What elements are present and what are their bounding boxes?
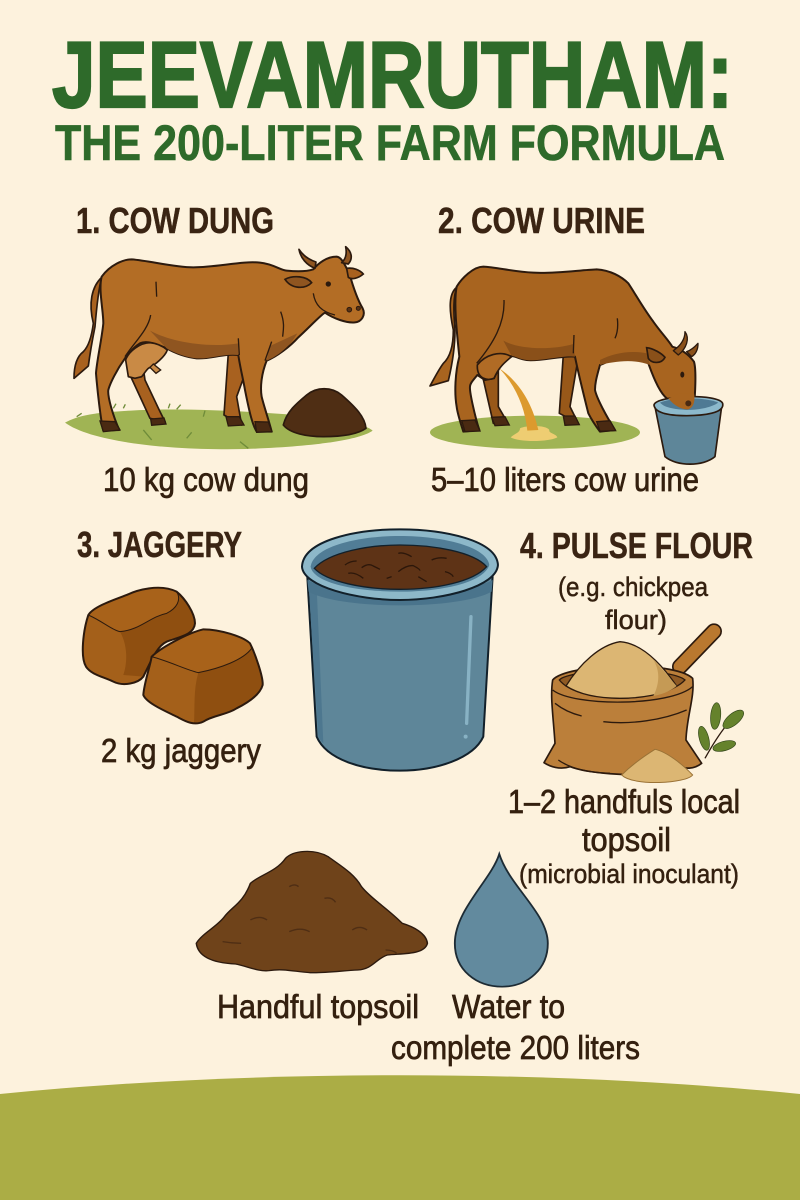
back block right face <box>120 592 195 677</box>
bucket inside <box>660 398 718 410</box>
cow muzzle over bucket <box>668 393 694 409</box>
small flour pile <box>622 749 693 783</box>
rim <box>302 529 498 600</box>
note: e.g. chickpea flour: flour) <box>605 605 667 635</box>
note: e.g. chickpea flour <box>558 572 709 635</box>
cow body <box>455 267 695 432</box>
hooves <box>462 416 616 432</box>
ear <box>647 348 665 362</box>
body lines <box>477 300 618 363</box>
tail <box>430 287 457 386</box>
cow far legs <box>130 353 244 425</box>
urine stream <box>499 368 538 431</box>
bucket rim <box>654 397 723 416</box>
caption: local topsoil: 1–2 handfuls local <box>508 783 740 820</box>
grass patch <box>430 416 640 449</box>
title <box>52 22 733 171</box>
back block <box>83 588 195 684</box>
caption: water to complete 200 liters: Water to <box>452 988 565 1025</box>
front block right face <box>194 648 263 724</box>
caption: 10 kg cow dung: 10 kg cow dung <box>103 461 309 498</box>
front block <box>143 629 263 723</box>
compost surface <box>314 545 487 589</box>
udder <box>477 354 512 379</box>
heading: 1. cow dung: 1. COW DUNG <box>76 200 274 241</box>
illustration: cow drinking and urinating <box>430 267 723 464</box>
soil marks <box>223 885 397 953</box>
back block top <box>88 588 179 632</box>
cow body <box>96 257 364 432</box>
highlight <box>467 617 471 723</box>
near ear <box>285 277 312 287</box>
drum body <box>307 577 493 771</box>
back block outline <box>83 588 195 684</box>
sprig <box>696 702 747 758</box>
caption: water to complete 200 liters <box>391 988 640 1066</box>
teat <box>150 364 161 373</box>
heading: 2. cow urine: 2. COW URINE <box>438 200 645 241</box>
caption: 2 kg jaggery: 2 kg jaggery <box>101 732 261 769</box>
front block outline <box>143 629 263 723</box>
flour mound <box>566 642 677 698</box>
belly shade <box>150 331 297 361</box>
inner wall <box>311 536 489 592</box>
illustration: water drop <box>455 854 548 987</box>
caption: local topsoil: (microbial inoculant) <box>519 859 739 889</box>
illustration: topsoil pile <box>196 851 427 973</box>
far legs <box>483 355 579 424</box>
under rim shade <box>307 580 493 605</box>
tail <box>74 277 102 378</box>
udder <box>126 343 167 378</box>
illustration: standing cow with dung pile <box>65 247 373 449</box>
face details <box>326 281 331 287</box>
urine puddle <box>511 426 557 441</box>
left shade <box>308 580 323 743</box>
compost marks <box>345 553 453 582</box>
caption: local topsoil: topsoil <box>582 821 671 858</box>
far ear <box>347 268 363 279</box>
bucket <box>655 407 722 464</box>
illustration: flour sack with scoop and sprig <box>544 631 747 783</box>
dung pile <box>283 389 366 437</box>
grass patch <box>65 410 373 449</box>
horns <box>299 247 351 268</box>
heading: 3. jaggery: 3. JAGGERY <box>77 524 242 565</box>
note: e.g. chickpea flour: (e.g. chickpea <box>558 572 709 602</box>
illustration: central blue drum <box>302 529 498 771</box>
illustration: jaggery blocks <box>83 588 263 724</box>
ground band <box>0 1075 800 1200</box>
caption: 5-10 liters cow urine: 5–10 liters cow urine <box>431 461 699 498</box>
belly shade <box>503 341 650 365</box>
hooves <box>100 417 272 432</box>
horns <box>673 332 698 357</box>
grass marks <box>77 404 248 448</box>
caption: local topsoil <box>508 783 740 889</box>
front block top <box>152 629 252 673</box>
scoop <box>680 631 714 667</box>
sack <box>544 666 702 775</box>
caption: water to complete 200 liters: complete 200 liters <box>391 1029 640 1066</box>
sack inner mouth <box>559 671 685 698</box>
eye <box>680 372 684 378</box>
caption: handful topsoil: Handful topsoil <box>217 988 419 1025</box>
sack rim fold <box>553 687 693 773</box>
flour right shade <box>653 660 677 696</box>
